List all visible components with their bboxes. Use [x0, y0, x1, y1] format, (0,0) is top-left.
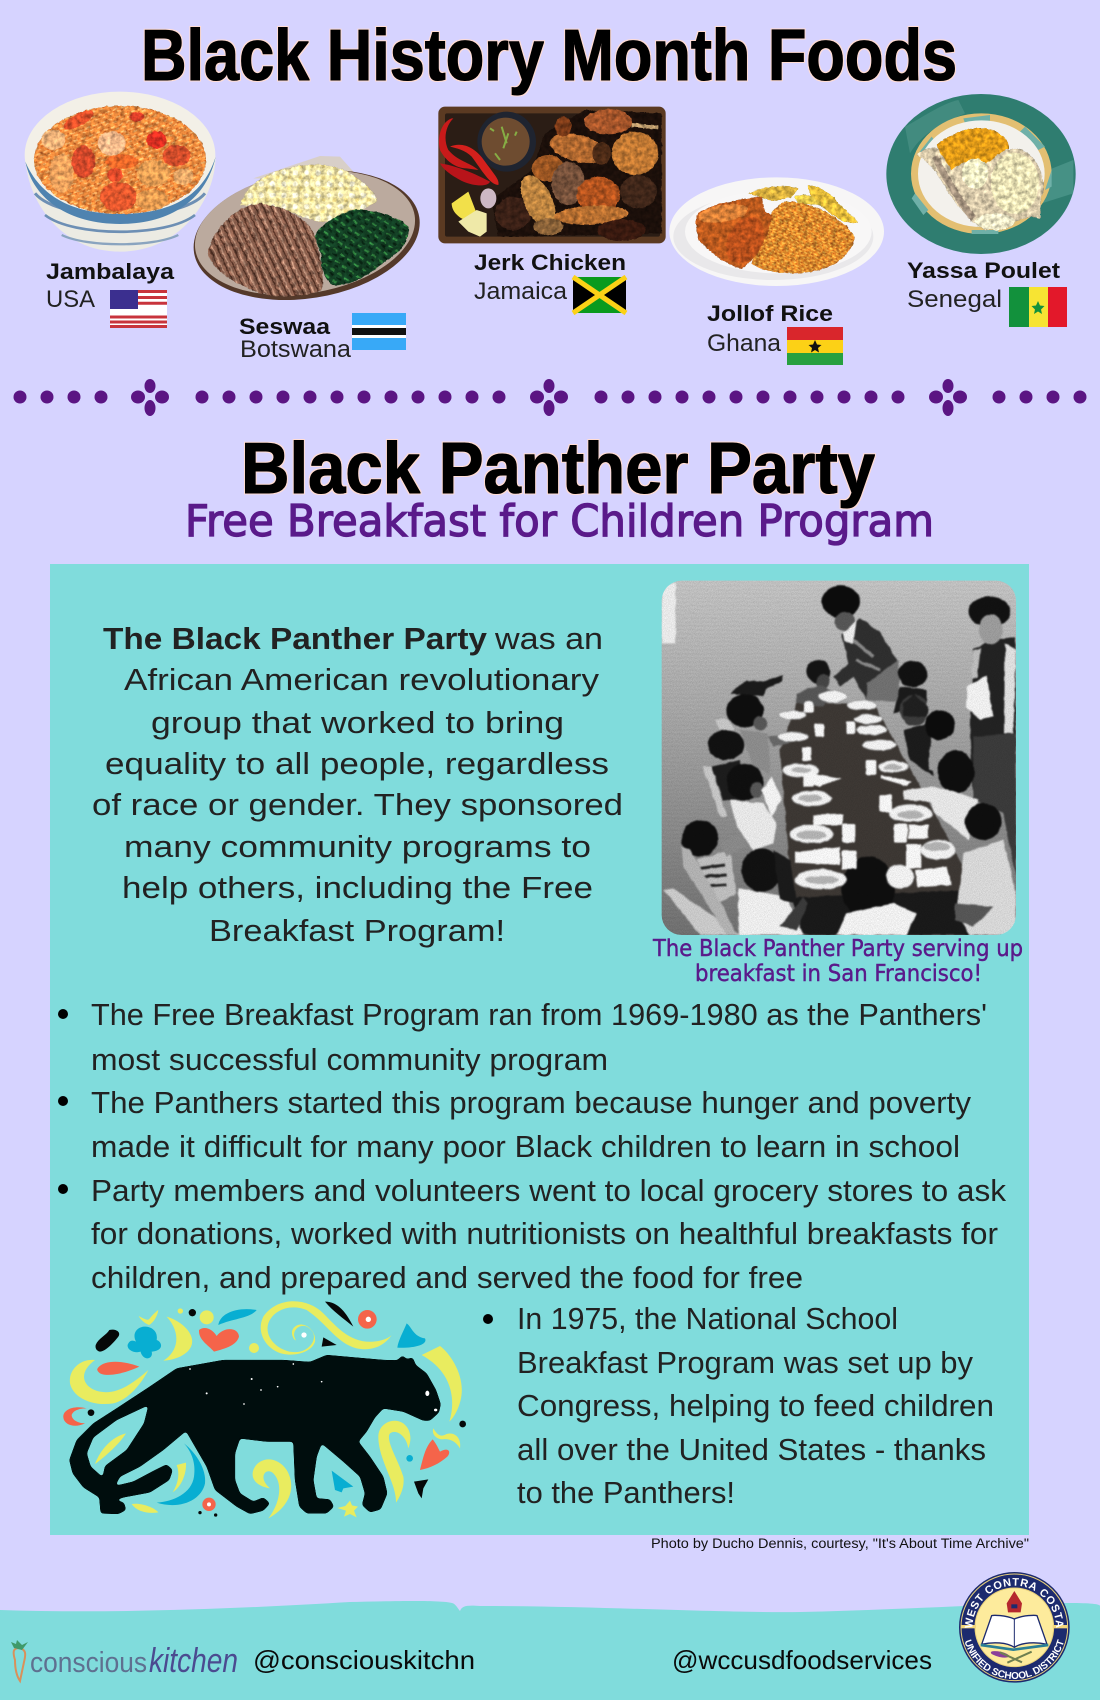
caption: photo: The Black Panther Party serving up — [652, 936, 1023, 962]
bullet list: program facts: for donations, worked with nutritionists on healthful breakfasts for — [91, 1216, 998, 1251]
subheading: Free Breakfast for Children Program: Free Breakfast for Children Program — [185, 496, 934, 547]
divider: dots and clovers — [14, 379, 1086, 416]
illustration: black panther with folk decoration — [63, 1301, 466, 1518]
credit: photo: Photo by Ducho Dennis, courtesy, "It's About Time Archive" — [651, 1536, 1029, 1551]
label: Jollof Rice Ghana: Jollof Rice — [707, 301, 833, 326]
text block: intro paragraph: group that worked to bring — [151, 705, 564, 740]
text block: intro paragraph: help others, including the Free — [122, 870, 593, 905]
icon: jerk chicken board — [438, 107, 666, 243]
logo: West Contra Costa seal — [959, 1572, 1070, 1683]
bullet list: program facts: made it difficult for many poor Black children to learn in school — [91, 1129, 960, 1164]
logo: West Contra Costa seal: WEST CONTRA COSTA — [964, 1578, 1064, 1628]
text block: intro paragraph: Breakfast Program! — [209, 913, 505, 948]
icon: yassa poulet plate — [886, 94, 1076, 254]
label: Jambalaya USA — [46, 259, 175, 313]
label: Yassa Poulet Senegal — [907, 258, 1061, 313]
text block: intro paragraph: The Black Panther Party — [103, 621, 488, 656]
label: Yassa Poulet Senegal: Senegal — [907, 286, 1002, 313]
photo: Black Panther Party serving breakfast — [653, 573, 1023, 943]
panther body — [69, 1355, 441, 1514]
text block: intro paragraph: African American revolutionary — [124, 662, 600, 697]
food: seswaa — [184, 155, 429, 363]
title: Black History Month Foods — [141, 16, 957, 96]
social handle: wccusdfoodservices: @wccusdfoodservices — [672, 1645, 932, 1675]
label: Yassa Poulet Senegal: Yassa Poulet — [907, 258, 1061, 283]
logo: West Contra Costa seal: UNIFIED SCHOOL DISTRICT — [965, 1639, 1064, 1679]
label: Jerk Chicken Jamaica: Jamaica — [474, 278, 568, 305]
icon: jollof rice plate — [669, 177, 884, 286]
icon: Botswana flag — [352, 313, 406, 350]
text block: intro paragraph: many community programs to — [124, 829, 591, 864]
social handle: consciouskitchn: @consciouskitchn — [253, 1645, 475, 1675]
bullet: National School Breakfast Program: all over the United States - thanks — [517, 1432, 986, 1467]
text block: intro paragraph: was an — [494, 621, 603, 656]
icon: USA flag — [110, 290, 167, 328]
bullet list: program facts — [58, 997, 1006, 1295]
heading: Black Panther Party: Black Panther Party — [241, 429, 875, 509]
label: Seswaa Botswana — [239, 314, 352, 363]
text block: intro paragraph — [92, 621, 623, 948]
bullet: National School Breakfast Program: In 1975, the National School — [517, 1301, 898, 1336]
food: jollof rice — [669, 177, 884, 365]
label: Jambalaya USA: Jambalaya — [46, 259, 175, 284]
bullet list: program facts: The Free Breakfast Program ran from 1969-1980 as the Panthers' — [91, 997, 987, 1032]
footer band — [0, 1601, 1100, 1700]
label: Jerk Chicken Jamaica: Jerk Chicken — [474, 250, 626, 275]
label: Jambalaya USA: USA — [46, 286, 95, 313]
bullet: National School Breakfast Program: to the Panthers! — [517, 1475, 735, 1510]
logo: conscious kitchen — [11, 1640, 238, 1681]
label: Jerk Chicken Jamaica — [474, 250, 626, 305]
label: Seswaa Botswana: Seswaa — [239, 314, 331, 339]
icon: carrot — [11, 1640, 28, 1681]
bullet: National School Breakfast Program: Congress, helping to feed children — [517, 1388, 994, 1423]
text block: intro paragraph: equality to all people, regardless — [105, 746, 609, 781]
bullet list: program facts: most successful community program — [91, 1042, 608, 1077]
bullet list: program facts: children, and prepared and served the food for free — [91, 1260, 803, 1295]
bullet: National School Breakfast Program: Breakfast Program was set up by — [517, 1345, 973, 1380]
logo: conscious kitchen: kitchen — [149, 1642, 238, 1680]
icon: seswaa plate — [184, 155, 429, 315]
caption: photo — [652, 936, 1023, 987]
bullet list: program facts: Party members and volunteers went to local grocery stores to ask — [91, 1173, 1006, 1208]
label: Jollof Rice Ghana: Ghana — [707, 330, 782, 357]
panel: teal content — [50, 564, 1029, 1535]
caption: photo: breakfast in San Francisco! — [695, 961, 982, 987]
icon: Senegal flag — [1009, 287, 1067, 327]
text block: intro paragraph: of race or gender. They sponsored — [92, 787, 623, 822]
icon: jambalaya bowl — [25, 92, 216, 252]
bullet list: program facts: The Panthers started this program because hunger and poverty — [91, 1085, 972, 1120]
food: jerk chicken — [438, 107, 666, 313]
logo: conscious kitchen: conscious — [30, 1647, 147, 1679]
label: Seswaa Botswana: Botswana — [240, 336, 352, 363]
label: Jollof Rice Ghana — [707, 301, 833, 357]
icon: Ghana flag — [787, 327, 843, 365]
icon: Jamaica flag — [573, 277, 626, 313]
food: jambalaya — [25, 92, 216, 328]
bullet: National School Breakfast Program — [483, 1301, 994, 1510]
food: yassa poulet — [886, 94, 1076, 327]
